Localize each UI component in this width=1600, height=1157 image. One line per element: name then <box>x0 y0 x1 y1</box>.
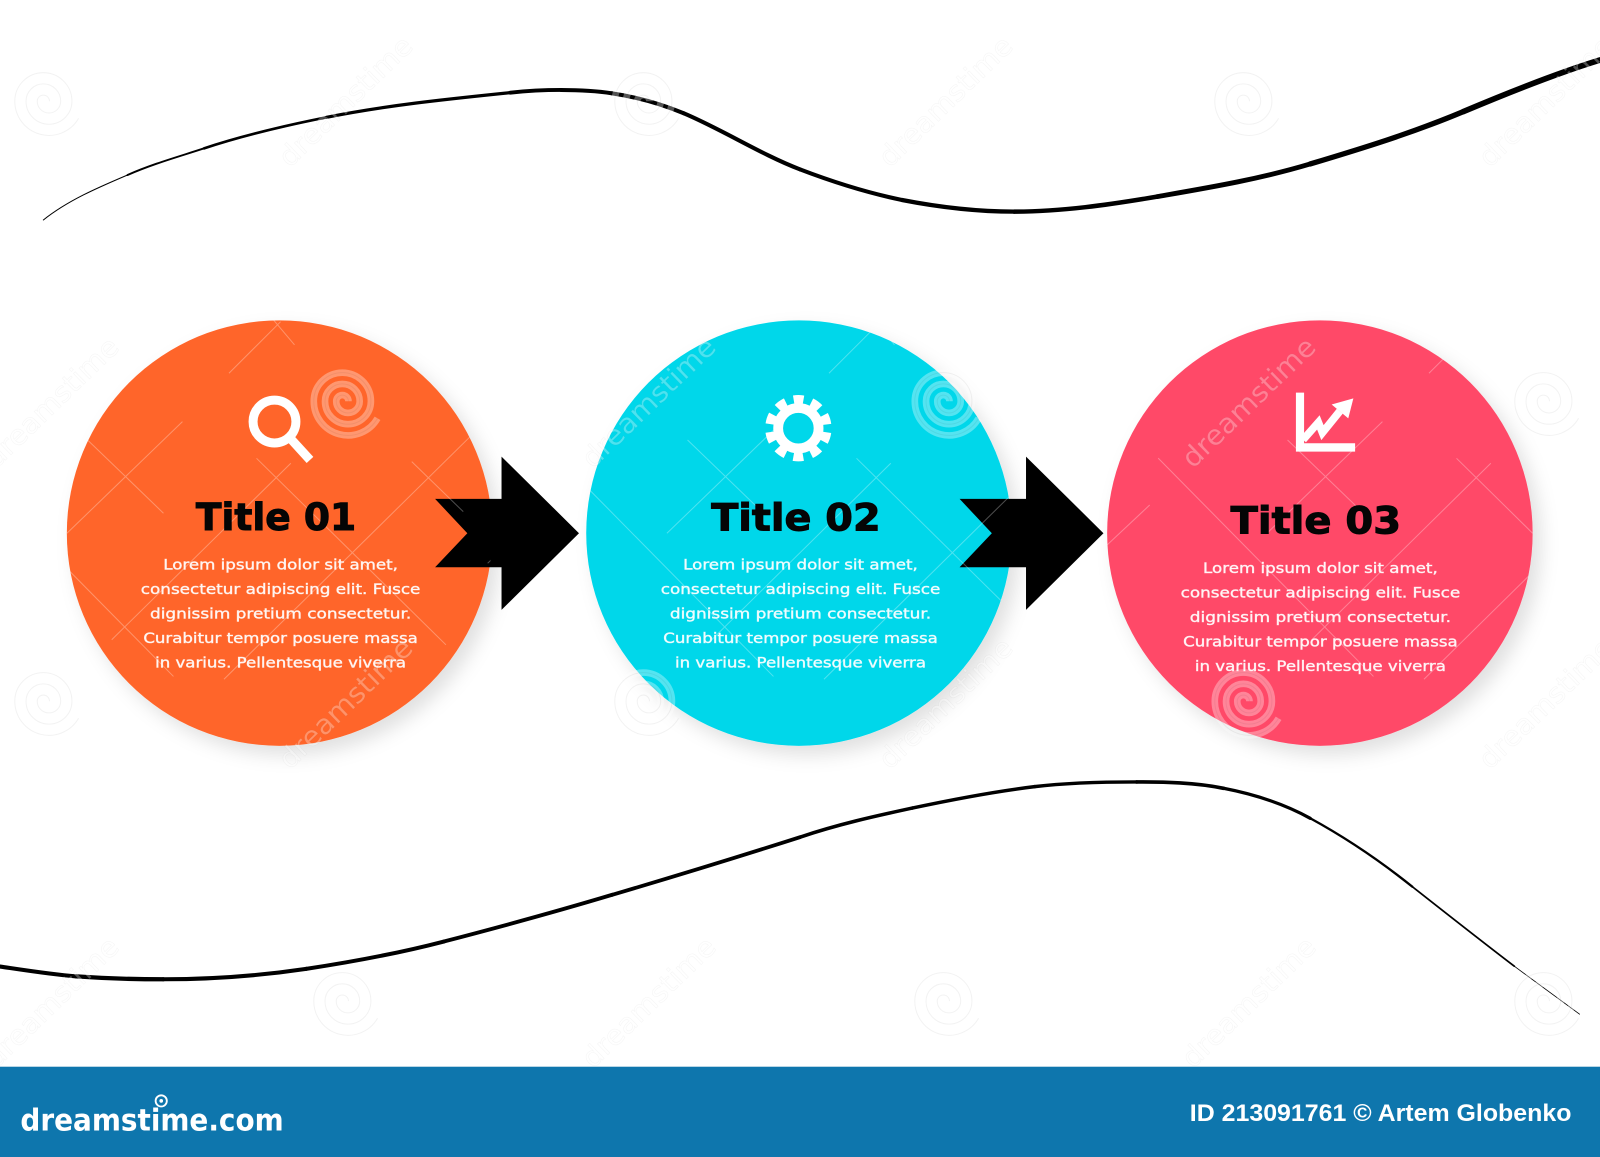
footer logo: dreamstime.com <box>20 1103 284 1138</box>
text block: step 3: Lorem ipsum dolor sit amet, <box>1203 561 1438 577</box>
top decorative curve <box>43 60 1600 220</box>
icon: gear <box>766 396 831 461</box>
text block: step 1 <box>141 557 420 671</box>
arrow: step 2 to step 3 <box>960 457 1103 610</box>
text block: step 2: Curabitur tempor posuere massa <box>663 631 938 647</box>
footer bar <box>0 1067 1600 1157</box>
title 02: Title 02 <box>711 496 881 540</box>
text block: step 3: Curabitur tempor posuere massa <box>1183 634 1458 650</box>
text block: step 2 <box>661 557 940 671</box>
watermark wordmarks: dreamstime <box>1175 931 1323 1074</box>
circle: orange step background <box>67 320 492 746</box>
text block: step 1: Curabitur tempor posuere massa <box>143 631 418 647</box>
text block: step 3: in varius. Pellentesque viverra <box>1195 659 1446 675</box>
watermark wordmarks: dreamstime <box>872 30 1019 173</box>
arrow: step 1 to step 2 <box>435 457 579 610</box>
watermark wordmarks: dreamstime <box>1175 331 1323 474</box>
watermark wordmarks: dreamstime <box>272 632 419 775</box>
watermark wordmarks: dreamstime <box>575 931 723 1074</box>
text block: step 2: in varius. Pellentesque viverra <box>675 655 926 671</box>
bottom decorative curve <box>0 782 1580 1014</box>
icon: growth chart <box>1296 393 1355 452</box>
text block: step 2: dignissim pretium consectetur. <box>670 606 931 622</box>
text block: step 1: consectetur adipiscing elit. Fusce <box>141 582 420 598</box>
watermark lines inside circles <box>0 320 1600 679</box>
text block: step 1: Lorem ipsum dolor sit amet, <box>163 557 398 573</box>
watermark wordmarks: dreamstime <box>575 331 723 474</box>
text block: step 3: consectetur adipiscing elit. Fusce <box>1181 585 1460 601</box>
text block: step 3: dignissim pretium consectetur. <box>1190 610 1451 626</box>
text block: step 1: in varius. Pellentesque viverra <box>155 655 406 671</box>
text block: step 2: Lorem ipsum dolor sit amet, <box>683 557 918 573</box>
footer credit: ID 213091761 © Artem Globenko <box>1190 1100 1571 1127</box>
circle: pink step background <box>1107 320 1533 746</box>
watermark wordmarks: dreamstime <box>272 30 419 173</box>
circle: cyan step background <box>586 320 1012 746</box>
text block: step 2: consectetur adipiscing elit. Fusce <box>661 582 940 598</box>
text block: step 1: dignissim pretium consectetur. <box>150 606 411 622</box>
icon: magnifying glass <box>253 400 310 460</box>
watermark wordmarks: dreamstime <box>872 632 1019 775</box>
text block: step 3 <box>1181 561 1460 675</box>
title 01: Title 01 <box>196 495 356 539</box>
title 03: Title 03 <box>1231 499 1401 543</box>
